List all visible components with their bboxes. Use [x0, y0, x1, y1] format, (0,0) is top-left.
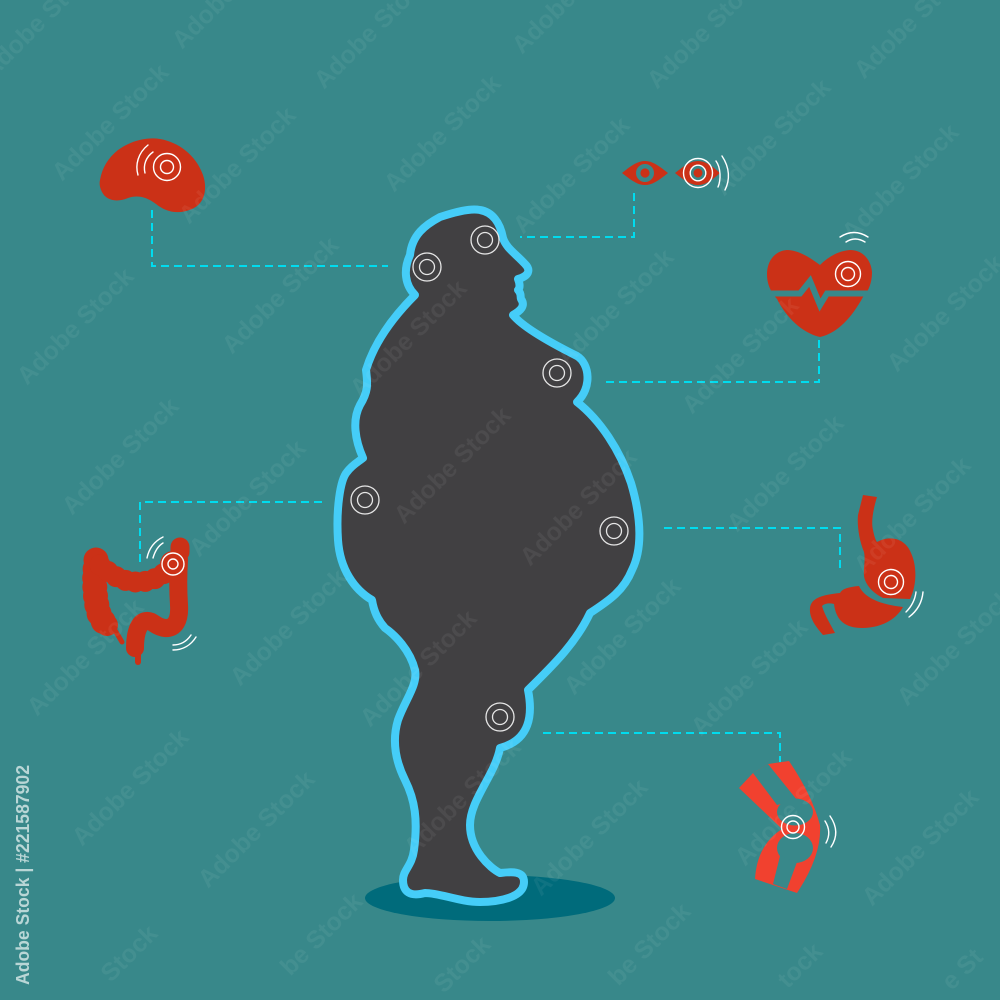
watermark text: Adobe Stock — [378, 69, 506, 197]
icon: intestines — [95, 537, 196, 662]
watermark text: Adobe Stock — [11, 262, 139, 390]
watermark text: Adobe Stock — [507, 111, 635, 239]
watermark text: Adobe Stock — [224, 563, 352, 691]
obese body silhouette with markers — [337, 209, 639, 902]
body outline — [337, 209, 639, 902]
watermark text: Adobe Stock — [216, 231, 344, 359]
watermark text: Adobe Stock — [344, 274, 472, 402]
watermark text: Adobe Stock — [192, 765, 320, 893]
icon: heart — [765, 232, 876, 337]
watermark text: Adobe Stock — [66, 723, 194, 851]
watermark text: Adobe Stock — [836, 118, 964, 246]
watermark text: tock — [772, 937, 828, 994]
watermark text: Adobe Stock — [514, 443, 642, 571]
watermark text: Adobe Stock — [856, 783, 984, 911]
watermark text: e St — [936, 943, 989, 995]
watermark text: be Stock — [603, 897, 696, 991]
watermark text: Adobe Stock — [685, 613, 813, 741]
dashed connectors — [140, 193, 840, 762]
watermark text: Adobe Stock — [708, 73, 836, 201]
watermark text: Adobe Stock — [388, 401, 516, 529]
watermark text: Adobe Stock — [46, 58, 174, 186]
ground shadow — [365, 875, 615, 921]
watermark text: Adobe Stock — [354, 604, 482, 732]
watermark text: Adobe Stock — [525, 773, 653, 901]
icon: liver — [100, 138, 205, 212]
watermark text: Stock — [428, 930, 496, 998]
watermark text: Adobe Stock — [56, 392, 184, 520]
icon: stomach — [810, 495, 923, 635]
body pain markers — [351, 226, 628, 731]
watermark text: Adobe Stock — [721, 409, 849, 537]
watermark text: Adobe Stock — [183, 434, 311, 562]
watermark text: Adobe Stock — [551, 243, 679, 371]
watermark text: Adobe Stock — [398, 733, 526, 861]
watermark text: be Stock — [275, 887, 368, 981]
watermark text: Adobe Stock — [729, 743, 857, 871]
watermark text: Adobe Stock — [676, 291, 804, 419]
watermark text: Adobe Stock — [173, 101, 301, 229]
icon: eyes — [622, 156, 728, 190]
watermark text: Adobe Stock — [558, 572, 686, 700]
watermark text: Adobe Stock — [848, 451, 976, 579]
watermark text: Adobe Stock — [21, 593, 149, 721]
watermark text: Stock — [95, 919, 163, 987]
icon: knee — [739, 761, 836, 893]
stock id text: Adobe Stock | #221587902 — [12, 765, 33, 985]
